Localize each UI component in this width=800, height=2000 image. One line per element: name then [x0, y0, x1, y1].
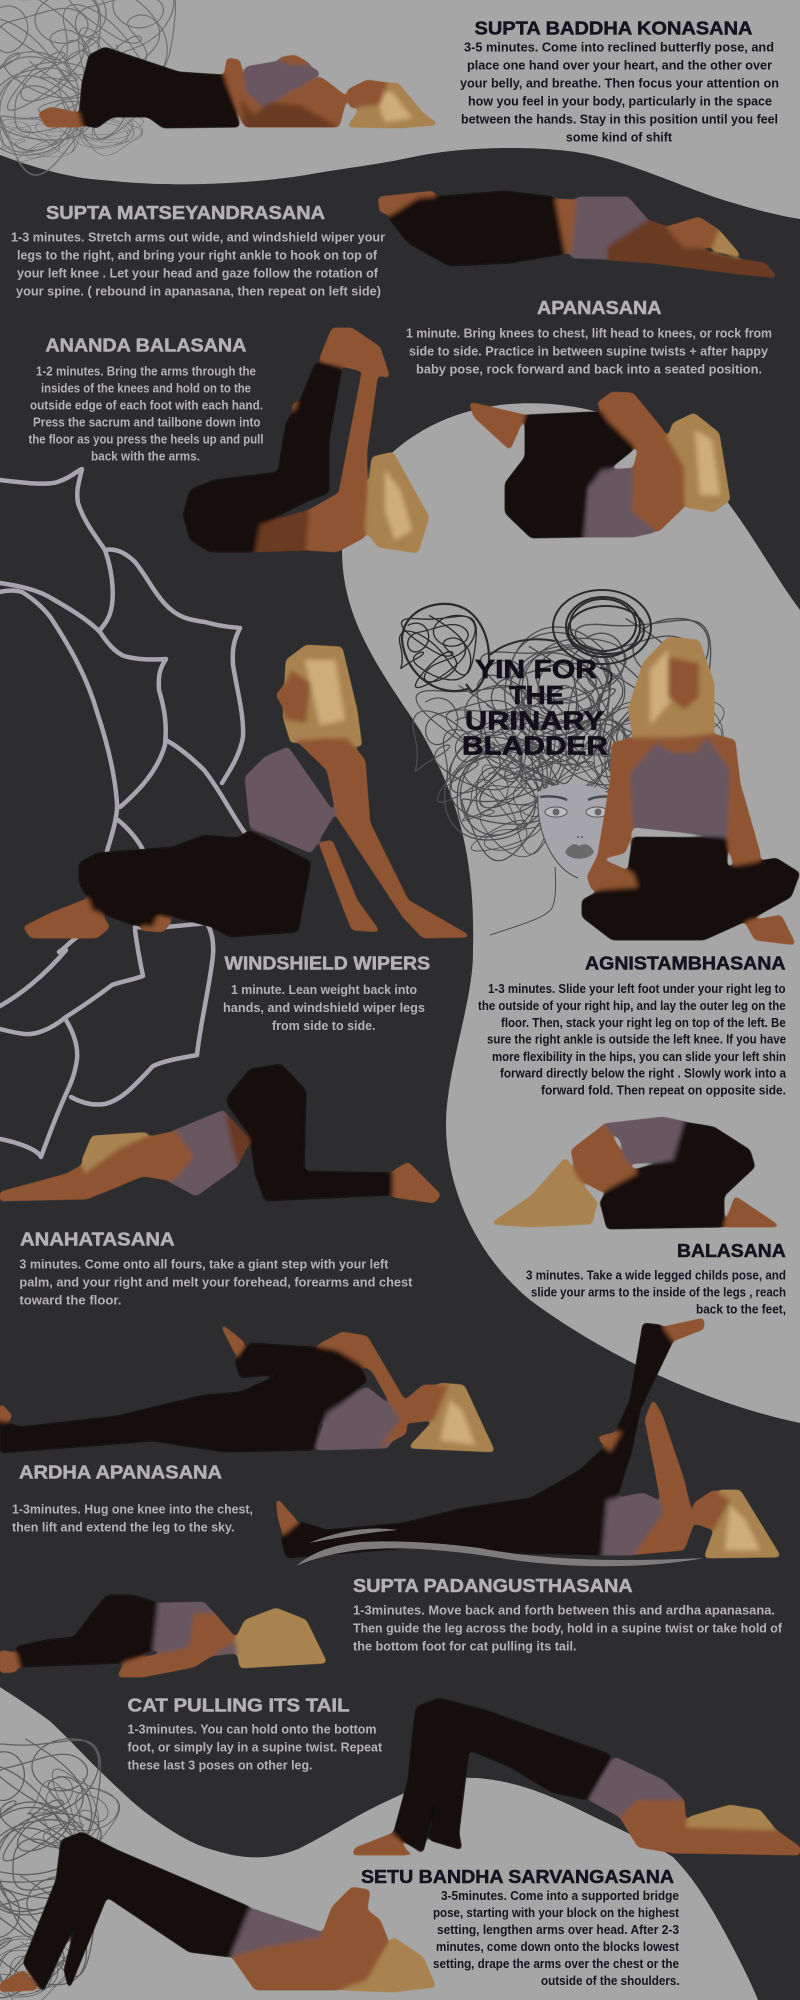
text: cat pulling its tail: these last 3 poses on other leg. — [128, 1758, 312, 1773]
text: ardha apanasana: then lift and extend the leg to the sky. — [12, 1520, 234, 1535]
icon: thought bubble left — [399, 604, 489, 692]
photo: setu bandha lower bridge pose — [0, 1832, 436, 1992]
text: windshield wipers: from side to side. — [272, 1018, 376, 1033]
text: supta padangusthasana: Then guide the leg across the body, hold in a supine twist or take hold of — [353, 1621, 783, 1636]
text: ananda balasana: insides of the knees and hold on to the — [41, 381, 251, 396]
text: supta matseyandrasana: your left knee . Let your head and gaze follow the rotation of — [17, 266, 379, 281]
text: ananda balasana: ANANDA BALASANA — [45, 335, 246, 356]
text: setu bandha sarvangasana: setting, drape the arms over the chest or the — [433, 1956, 679, 1971]
text: supta matseyandrasana — [11, 202, 385, 299]
text: apanasana: 1 minute. Bring knees to chest, lift head to knees, or rock from — [406, 325, 772, 340]
text: cat pulling its tail: 1-3minutes. You can hold onto the bottom — [128, 1722, 376, 1737]
text: supta matseyandrasana: your spine. ( rebound in apanasana, then repeat on left side) — [16, 284, 381, 299]
text: ananda balasana: outside edge of each foot with each hand. — [30, 398, 263, 413]
scribble: bottom left tangle — [0, 1739, 125, 2000]
text: supta baddha konasana: 3-5 minutes. Come into reclined butterfly pose, and — [464, 40, 774, 55]
text: supta baddha konasana: some kind of shift — [566, 130, 673, 145]
photo: balasana pose — [490, 1117, 781, 1229]
title: THE — [509, 680, 564, 710]
text: apanasana — [406, 297, 772, 377]
photo: setu bandha upper bridge pose — [352, 1698, 800, 1855]
text: supta baddha konasana: place one hand over your heart, and the other over — [467, 58, 772, 73]
illustration: line-art face — [490, 784, 620, 935]
text: anahatasana: 3 minutes. Come onto all fours, take a giant step with your left — [19, 1256, 389, 1272]
photo: apanasana pose — [469, 392, 730, 538]
text: ardha apanasana: 1-3minutes. Hug one knee into the chest, — [12, 1502, 253, 1517]
text: ardha apanasana: ARDHA APANASANA — [19, 1462, 222, 1483]
photo: supta matseyandrasana pose — [378, 191, 778, 278]
title: BLADDER — [462, 730, 608, 760]
photo: supta baddha konasana pose — [38, 47, 439, 128]
text: ananda balasana: 1-2 minutes. Bring the arms through the — [36, 364, 256, 379]
text: setu bandha sarvangasana: SETU BANDHA SARVANGASANA — [361, 1866, 674, 1887]
text: anahatasana — [19, 1229, 413, 1308]
text: windshield wipers: hands, and windshield wiper legs — [223, 1000, 425, 1015]
text: anahatasana: toward the floor. — [19, 1293, 121, 1308]
photo: cat pulling its tail pose — [0, 1595, 327, 1677]
photo: ardha apanasana pose — [0, 1322, 495, 1453]
photo: supta padangusthasana pose — [276, 1318, 781, 1558]
text: supta baddha konasana: your belly, and breathe. Then focus your attention on — [460, 76, 779, 91]
text: apanasana: side to side. Practice in between supine twists + after happy — [409, 344, 769, 359]
text: supta padangusthasana: 1-3minutes. Move back and forth between this and ardha apanasana. — [353, 1603, 775, 1618]
text: windshield wipers: 1 minute. Lean weight back into — [231, 982, 417, 997]
text: ananda balasana: back with the arms. — [91, 449, 200, 464]
text: setu bandha sarvangasana: minutes, come down onto the blocks lowest — [436, 1939, 680, 1954]
text: balasana — [526, 1240, 786, 1317]
title — [462, 654, 608, 760]
decorative swoosh under leg — [296, 1529, 704, 1566]
text: agnistambhasana — [478, 953, 787, 1098]
scribble: top left tangle — [0, 0, 175, 175]
text: cat pulling its tail: foot, or simply lay in a supine twist. Repeat — [128, 1740, 383, 1755]
text: balasana: BALASANA — [677, 1240, 786, 1261]
text: agnistambhasana: AGNISTAMBHASANA — [585, 953, 786, 974]
decorative mandala outline — [0, 469, 245, 1157]
text: supta padangusthasana — [353, 1575, 783, 1654]
text: cat pulling its tail — [128, 1695, 383, 1773]
photo: ananda balasana pose — [183, 328, 429, 553]
text: supta baddha konasana — [460, 17, 779, 145]
text: agnistambhasana: forward fold. Then repeat on opposite side. — [541, 1082, 786, 1098]
text: setu bandha sarvangasana — [361, 1866, 680, 1988]
icon: thought bubble right — [490, 590, 651, 684]
text: supta matseyandrasana: SUPTA MATSEYANDRASANA — [46, 202, 325, 223]
text: supta baddha konasana: how you feel in your body, particularly in the space — [468, 94, 772, 109]
text: supta padangusthasana: the bottom foot for cat pulling its tail. — [353, 1639, 576, 1654]
text: cat pulling its tail: CAT PULLING ITS TAIL — [128, 1695, 350, 1716]
text: ananda balasana: Press the sacrum and tailbone down into — [33, 415, 261, 430]
text: setu bandha sarvangasana: pose, starting with your block on the highest — [433, 1905, 680, 1920]
text: windshield wipers — [223, 953, 430, 1033]
text: apanasana: APANASANA — [537, 297, 662, 318]
text: setu bandha sarvangasana: outside of the shoulders. — [541, 1973, 680, 1988]
text: ananda balasana: the floor as you press the heels up and pull — [28, 432, 264, 447]
photo: anahatasana pose — [0, 1064, 441, 1203]
text: setu bandha sarvangasana: 3-5minutes. Come into a supported bridge — [441, 1888, 679, 1903]
title: YIN FOR — [475, 654, 597, 684]
text: supta padangusthasana: SUPTA PADANGUSTHASANA — [353, 1575, 633, 1596]
background: top light wave — [0, 0, 800, 219]
background: bottom light wave — [0, 1687, 758, 2000]
text: apanasana: baby pose, rock forward and back into a seated position. — [416, 362, 762, 377]
text: supta matseyandrasana: legs to the right, and bring your right ankle to hook on top of — [17, 248, 378, 263]
scribble: tangled hair around face — [413, 618, 724, 874]
photo: agnistambhasana seated pose — [582, 637, 800, 945]
text: supta baddha konasana: between the hands. Stay in this position until you feel — [461, 112, 778, 127]
text: anahatasana: ANAHATASANA — [20, 1229, 175, 1250]
text: setu bandha sarvangasana: setting, lengthen arms over head. After 2-3 — [437, 1922, 679, 1937]
text: ananda balasana — [28, 335, 264, 464]
text: windshield wipers: WINDSHIELD WIPERS — [224, 953, 430, 974]
text: supta matseyandrasana: 1-3 minutes. Stretch arms out wide, and windshield wiper your — [11, 230, 385, 245]
title: URINARY — [465, 706, 604, 736]
text: anahatasana: palm, and your right and melt your forehead, forearms and chest — [19, 1275, 413, 1290]
text: supta baddha konasana: SUPTA BADDHA KONASANA — [474, 17, 752, 38]
text: ardha apanasana — [12, 1462, 253, 1535]
text: balasana: back to the feet, — [696, 1302, 786, 1317]
photo: windshield wipers seated pose — [23, 645, 472, 938]
background: centre light blob — [342, 403, 800, 1423]
